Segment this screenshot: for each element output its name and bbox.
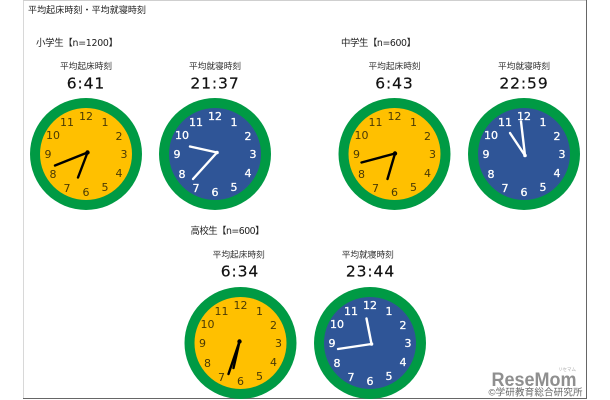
clock: bedtime 23:44: 4 [400, 356, 406, 369]
wake-up label and time: 平均起床時刻 [368, 60, 421, 71]
clock: wake-up 6:43: 3 [429, 148, 436, 161]
clock: wake-up 6:41: 6 [82, 186, 90, 199]
wake-up label and time [213, 248, 265, 281]
wake-up label and time: 6:43 [375, 74, 414, 92]
bedtime label and time: 23:44 [346, 263, 395, 281]
clock: wake-up 6:34: 2 [270, 319, 277, 332]
clock: wake-up 6:34: 11 [214, 305, 228, 318]
clock: bedtime 21:37: 5 [230, 181, 238, 194]
panel: elementary school [30, 37, 271, 210]
watermark: ReseMom logo [488, 367, 583, 398]
watermark: ReseMom logo: ©学研教育総合研究所 [488, 386, 583, 398]
clock: bedtime 23:44: 2 [400, 319, 406, 332]
heading: junior high school: 中学生【n=600】 [341, 37, 416, 49]
clock: wake-up 6:43: 1 [410, 116, 417, 129]
clock: bedtime 23:44: 3 [404, 337, 412, 350]
clock: bedtime 22:59: 1 [540, 116, 546, 129]
wake-up label and time [368, 60, 421, 92]
wake-up label and time: 平均起床時刻 [60, 60, 112, 71]
clock: bedtime 21:37: 12 [208, 110, 222, 123]
clock: bedtime 21:37: 9 [174, 148, 180, 161]
watermark: ReseMom logo: ReseMom [492, 370, 576, 391]
clock: wake-up 6:41: 4 [116, 167, 122, 180]
clock: wake-up 6:34: 7 [218, 371, 225, 384]
clock: wake-up 6:43: 4 [424, 167, 431, 180]
clock: bedtime 22:59: 3 [558, 148, 566, 161]
clock: wake-up 6:34: 10 [200, 318, 214, 331]
clock: bedtime 23:44: 5 [386, 370, 392, 383]
clock: bedtime 22:59: 6 [520, 186, 528, 199]
bedtime label and time [342, 248, 395, 281]
wake-up label and time: 6:41 [67, 74, 105, 92]
clock: bedtime 23:44: 11 [344, 305, 358, 318]
clock: bedtime 23:44: 8 [334, 357, 340, 370]
clock: bedtime 22:59: 10 [484, 129, 498, 142]
clock: wake-up 6:43: 2 [424, 130, 431, 143]
wake-up label and time [60, 60, 112, 92]
clock: wake-up 6:41: 3 [120, 148, 128, 161]
bedtime label and time [498, 60, 550, 92]
clock: wake-up 6:34: 5 [256, 370, 263, 383]
wake-up label and time: 平均起床時刻 [213, 248, 265, 260]
clock: wake-up 6:41: 8 [50, 168, 56, 181]
bedtime label and time: 平均就寝時刻 [498, 60, 550, 71]
heading: elementary school: 小学生【n=1200】 [36, 37, 118, 49]
clock: wake-up 6:41: 10 [46, 129, 60, 142]
bedtime label and time: 平均就寝時刻 [189, 60, 241, 71]
clock: bedtime 23:44: 7 [348, 371, 354, 384]
clock: wake-up 6:34: 3 [275, 337, 282, 350]
clock: bedtime 23:44: 1 [386, 305, 392, 318]
bedtime label and time: 22:59 [499, 74, 549, 92]
heading: high school: 高校生【n=600】 [190, 225, 264, 237]
clock: bedtime 23:44: 6 [366, 375, 374, 388]
clock: bedtime 23:44 [314, 287, 426, 399]
watermark: ReseMom logo: リセマム [558, 367, 576, 373]
clock: bedtime 22:59: 9 [482, 148, 490, 161]
clock: bedtime 21:37: 11 [189, 116, 203, 129]
title: 平均起床時刻・平均就寝時刻 [28, 4, 146, 15]
clock: bedtime 22:59 [468, 98, 580, 210]
clock: wake-up 6:34: 9 [199, 337, 206, 350]
clock: wake-up 6:41: 7 [64, 182, 70, 195]
clock: wake-up 6:43: 10 [354, 129, 368, 142]
clock: wake-up 6:41: 11 [60, 116, 74, 129]
clock: wake-up 6:43: 12 [388, 110, 402, 123]
clock: bedtime 21:37: 1 [230, 116, 238, 129]
panel: junior high school [338, 37, 580, 210]
clock: bedtime 22:59: 2 [554, 130, 560, 143]
clock: wake-up 6:34: 4 [270, 356, 277, 369]
clock: bedtime 21:37: 2 [244, 130, 252, 143]
clock: wake-up 6:43: 8 [358, 168, 365, 181]
clock: bedtime 22:59: 12 [517, 110, 531, 123]
panel: high school [184, 225, 426, 399]
clock: bedtime 23:44: 10 [330, 318, 344, 331]
clock: wake-up 6:43: 9 [353, 148, 360, 161]
clock: bedtime 22:59: 7 [502, 182, 508, 195]
clock: bedtime 23:44: 12 [363, 299, 377, 312]
clock: wake-up 6:41: 9 [44, 148, 52, 161]
clock: wake-up 6:43: 7 [372, 182, 379, 195]
clock: wake-up 6:43: 5 [410, 181, 417, 194]
clock: bedtime 21:37 [159, 98, 271, 210]
clock: wake-up 6:41: 2 [116, 130, 122, 143]
wake-up label and time: 6:34 [221, 263, 259, 281]
clock: bedtime 21:37: 4 [244, 167, 252, 180]
clock: bedtime 21:37: 7 [192, 182, 200, 195]
clock: wake-up 6:34: 1 [256, 305, 263, 318]
clock: bedtime 21:37: 6 [212, 186, 218, 199]
bedtime label and time: 平均就寝時刻 [342, 248, 394, 260]
clock: bedtime 23:44: 9 [328, 337, 336, 350]
clock: bedtime 21:37: 8 [178, 168, 186, 181]
clock: wake-up 6:43 [338, 98, 450, 210]
clock: wake-up 6:43: 11 [368, 116, 382, 129]
clock: bedtime 22:59: 8 [488, 168, 494, 181]
clock: wake-up 6:41: 1 [102, 116, 108, 129]
clock: wake-up 6:41: 12 [79, 110, 93, 123]
clock: wake-up 6:34: 8 [204, 357, 211, 370]
clock: wake-up 6:34: 12 [234, 299, 248, 312]
clock: bedtime 22:59: 5 [540, 181, 546, 194]
clock: bedtime 22:59: 4 [554, 167, 560, 180]
clock: wake-up 6:41: 5 [102, 181, 108, 194]
clock: bedtime 22:59: 11 [498, 116, 512, 129]
clock: bedtime 21:37: 10 [175, 129, 189, 142]
bedtime label and time [189, 60, 241, 92]
bedtime label and time: 21:37 [190, 74, 240, 92]
clock: bedtime 21:37: 3 [250, 148, 256, 161]
clock: wake-up 6:34: 6 [237, 375, 244, 388]
clock: wake-up 6:41 [30, 98, 142, 210]
clock: wake-up 6:43: 6 [391, 186, 398, 199]
clock: wake-up 6:34 [184, 287, 296, 399]
